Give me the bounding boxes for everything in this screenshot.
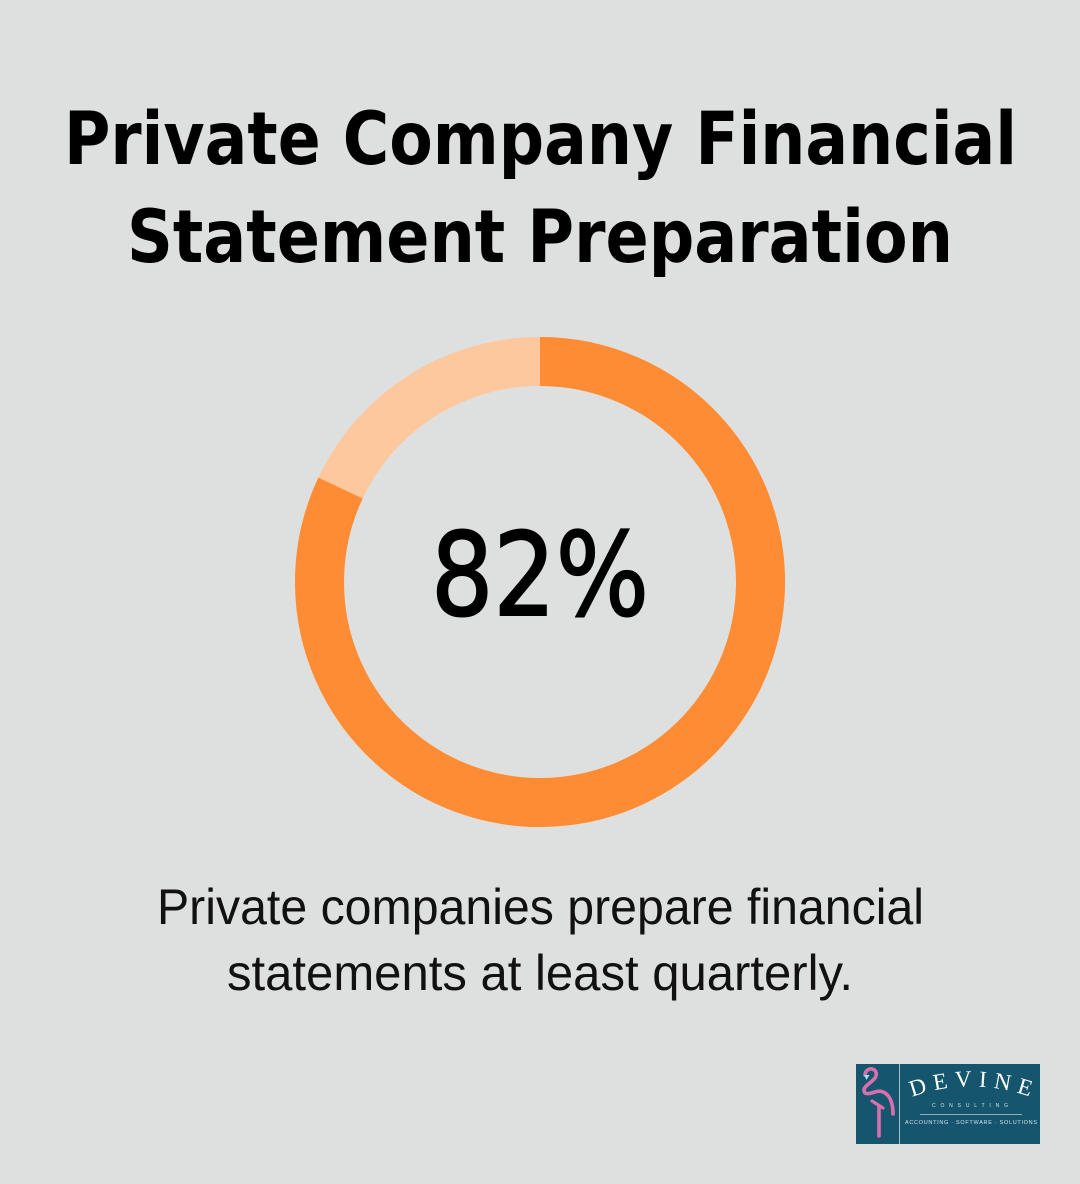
logo subtitle: CONSULTING — [932, 1103, 1008, 1109]
description text: Private companies prepare financial — [157, 879, 924, 935]
title — [64, 97, 1017, 280]
title: Statement Preparation — [127, 195, 953, 280]
chart arc: 82% — [320, 362, 761, 802]
description text: statements at least quarterly. — [227, 945, 853, 1001]
logo tagline: ACCOUNTING · SOFTWARE · SOLUTIONS — [905, 1120, 1037, 1126]
logo wordmark — [912, 1086, 1031, 1097]
logo: Devine Consulting: DEVINE — [908, 1071, 1032, 1096]
donut chart: 82% — [320, 362, 761, 802]
logo divider — [899, 1064, 900, 1144]
percentage value: 82% — [431, 509, 649, 643]
icon: flamingo — [864, 1069, 893, 1136]
icon: flamingo beak — [864, 1075, 870, 1080]
logo: Devine Consulting — [856, 1064, 1040, 1144]
logo rule — [920, 1114, 1022, 1115]
description text — [157, 879, 924, 1001]
chart track: remaining 18% — [320, 362, 760, 802]
